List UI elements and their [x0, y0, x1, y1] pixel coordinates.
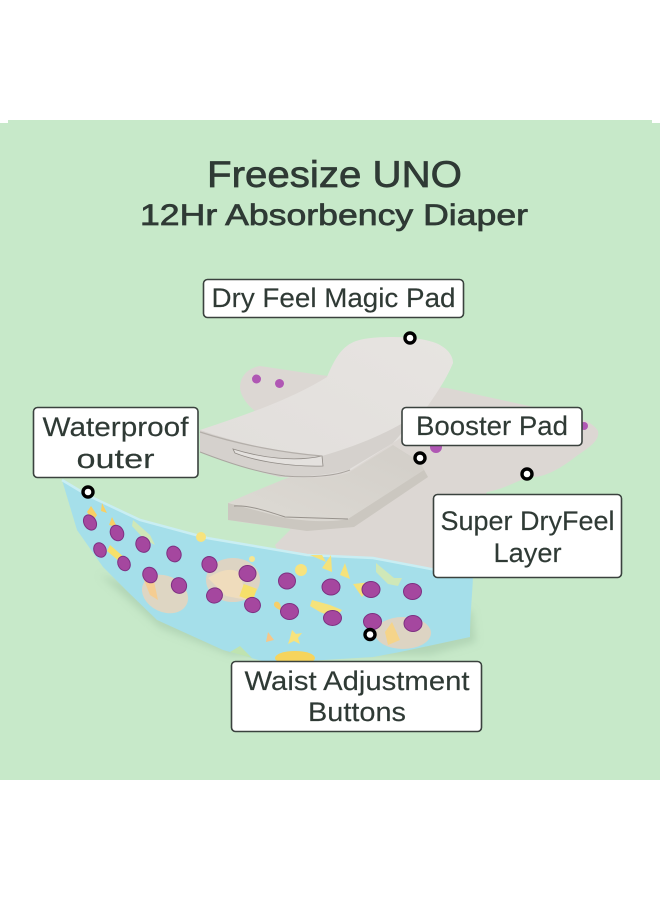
label: Booster Pad: Booster Pad [416, 411, 568, 441]
label: Waist Adjustment Buttons [232, 662, 482, 732]
booster pad [228, 445, 428, 531]
waterproof outer with prints [62, 480, 473, 665]
label: Dry Feel Magic Pad: Dry Feel Magic Pad [212, 283, 456, 313]
character prints [136, 558, 431, 665]
super dryfeel layer [240, 366, 598, 570]
title: Freesize UNO [207, 154, 462, 195]
label: Waist Adjustment Buttons: Buttons [308, 697, 406, 727]
label: Super DryFeel Layer: Layer [494, 538, 562, 568]
label: Super DryFeel Layer: Super DryFeel [440, 506, 614, 536]
marker dots [83, 333, 532, 640]
title: 12Hr Absorbency Diaper [140, 199, 528, 232]
label: Waterproof outer [34, 408, 198, 478]
label: Waterproof outer: outer [76, 444, 155, 474]
title [140, 154, 528, 232]
diaper illustration [62, 337, 598, 665]
label: Super DryFeel Layer [434, 494, 622, 578]
dry feel magic pad [200, 337, 453, 477]
label: Waterproof outer: Waterproof [42, 412, 189, 442]
label: Waist Adjustment Buttons: Waist Adjustment [244, 666, 470, 696]
shadow under diaper [100, 575, 476, 655]
buttons [81, 513, 422, 632]
label: Booster Pad [402, 408, 582, 446]
small decorations [87, 503, 402, 658]
background panel [0, 120, 660, 780]
